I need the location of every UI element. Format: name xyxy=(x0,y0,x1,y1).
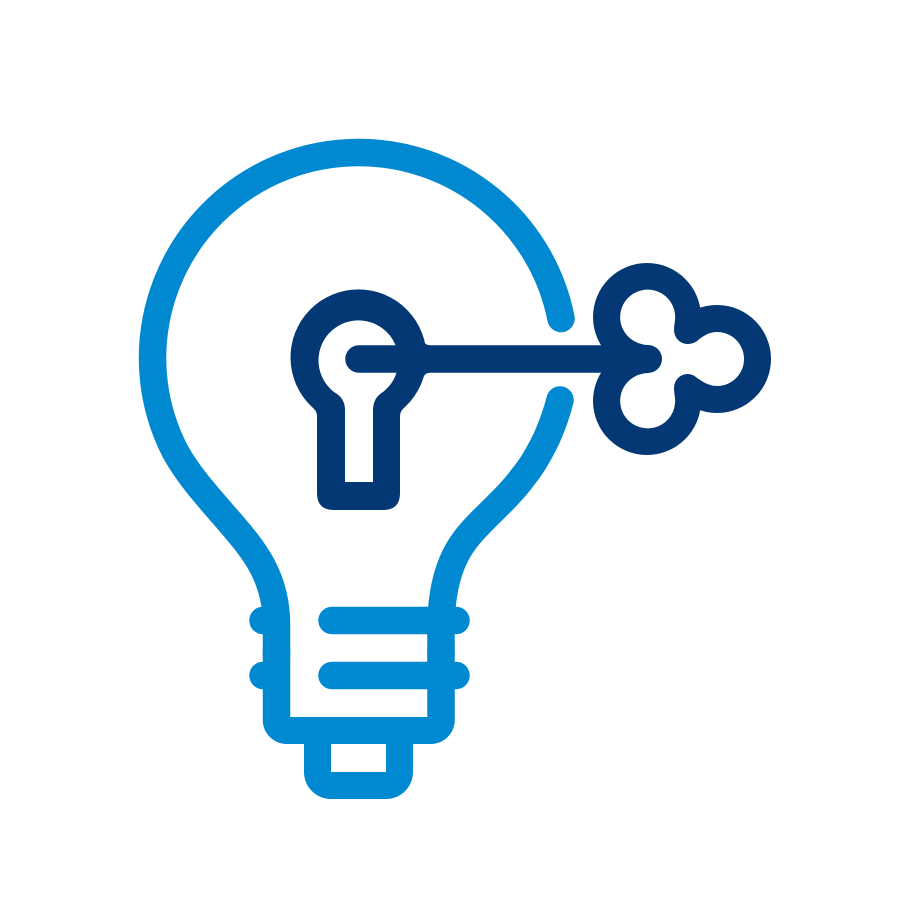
key shaft fillets xyxy=(423,340,431,378)
icon: key xyxy=(359,263,771,455)
bulb collar and screw base xyxy=(263,650,455,799)
key shaft xyxy=(359,345,648,373)
bulb glass outline right xyxy=(441,400,560,655)
bulb glass outline left and top xyxy=(152,152,561,655)
key bow inner opening xyxy=(620,290,744,428)
screw threads xyxy=(263,620,456,676)
key bow outer lobes xyxy=(593,263,771,455)
icon: lightbulb xyxy=(152,152,561,799)
icon: keyhole xyxy=(291,289,427,510)
